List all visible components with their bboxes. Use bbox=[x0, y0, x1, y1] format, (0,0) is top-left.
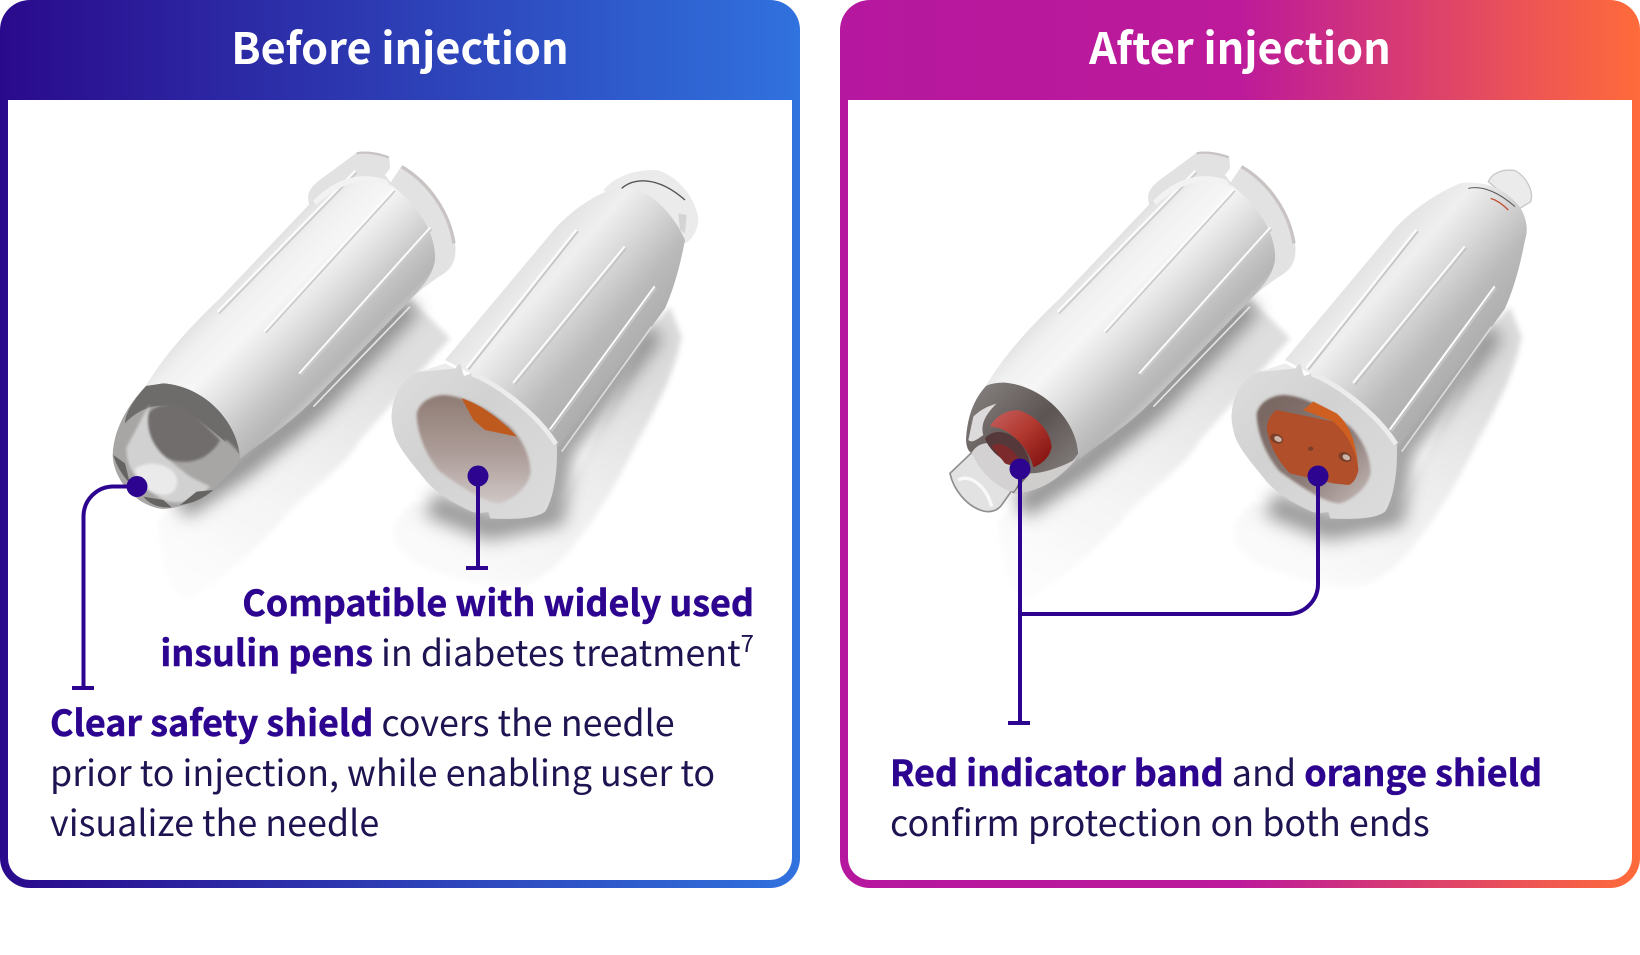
device: cap with orange shield bbox=[1232, 170, 1531, 587]
text: compatible with widely used insulin pens: insulin pens in diabetes treatment bbox=[160, 625, 741, 677]
panel: after injection bbox=[840, 0, 1640, 888]
device: cap with extended shield and red band bbox=[950, 152, 1295, 597]
text: red indicator band and orange shield bbox=[890, 745, 1542, 847]
panel frame: before injection bbox=[0, 0, 800, 888]
device: cap with open pen end bbox=[392, 170, 698, 587]
device: cap with clear safety shield bbox=[113, 152, 455, 597]
callout line: compatible pens bbox=[466, 466, 488, 568]
callout line: red band and orange shield bbox=[1008, 458, 1328, 723]
text: clear safety shield: Clear safety shield covers the needle bbox=[50, 695, 675, 747]
text: clear safety shield: prior to injection, while enabling user to bbox=[50, 745, 715, 797]
callout line: clear safety shield bbox=[72, 476, 148, 688]
heading: before injection: Before injection bbox=[231, 15, 569, 77]
text: compatible with widely used insulin pens bbox=[160, 575, 754, 677]
text: compatible with widely used insulin pens: 7 bbox=[741, 624, 754, 659]
text: clear safety shield bbox=[50, 695, 715, 847]
panel: before injection bbox=[0, 0, 800, 888]
panel frame: after injection bbox=[840, 0, 1640, 888]
text: red indicator band and orange shield: Red indicator band and orange shield bbox=[890, 745, 1542, 797]
text: compatible with widely used insulin pens: Compatible with widely used bbox=[242, 575, 754, 627]
heading: after injection: After injection bbox=[1088, 15, 1391, 77]
text: clear safety shield: visualize the needle bbox=[50, 795, 379, 847]
text: red indicator band and orange shield: confirm protection on both ends bbox=[890, 795, 1430, 847]
